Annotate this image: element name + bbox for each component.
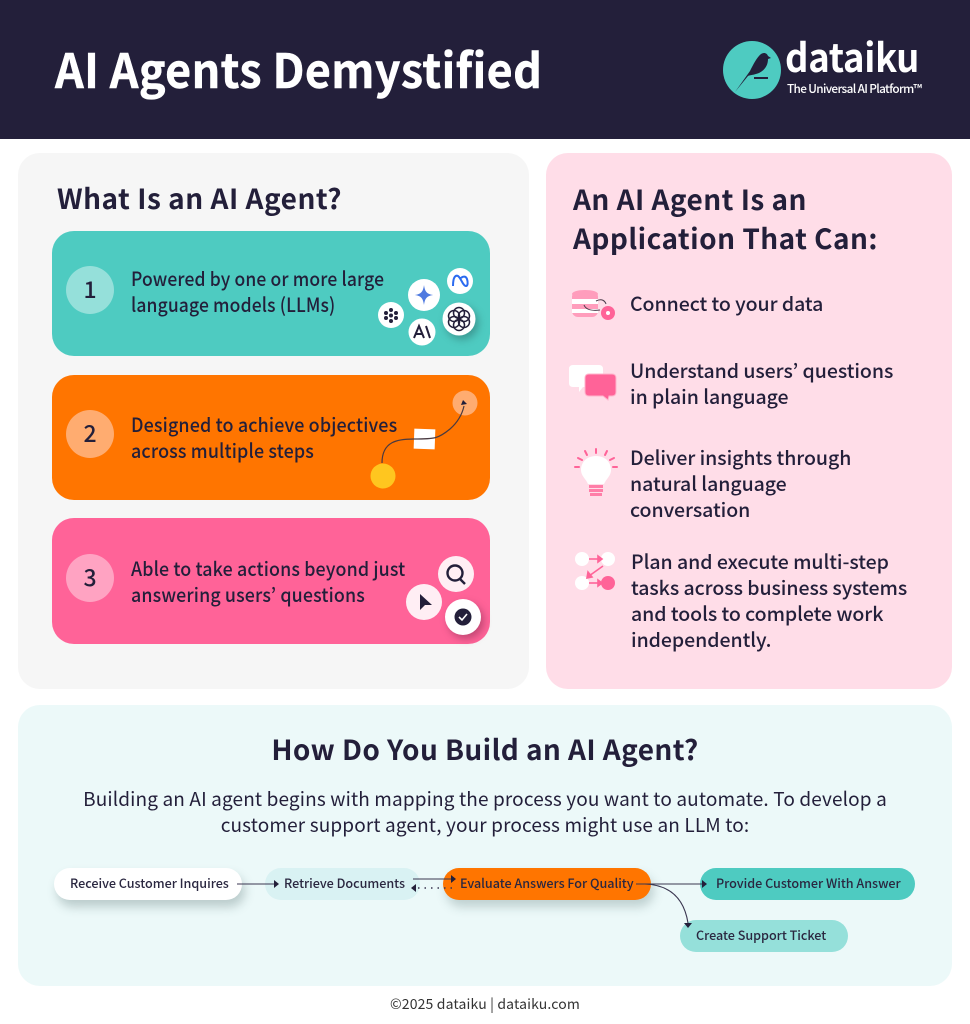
text: deliver insights: natural language — [630, 468, 787, 497]
card 2 text — [131, 409, 397, 464]
card 1: LLMs — [52, 231, 490, 356]
icon: speech bubbles — [569, 365, 616, 401]
flow arrows — [237, 875, 707, 928]
intro paragraph: Building an AI agent begins with mapping the process you want to automate. To develop a — [83, 785, 887, 812]
number 1: 1 — [83, 271, 97, 305]
number 3: 3 — [83, 559, 97, 593]
text: deliver insights: Deliver insights through — [630, 442, 851, 471]
card 3 text: answering users’ questions — [131, 579, 365, 608]
text: understand questions: in plain language — [630, 381, 789, 410]
card 1 text: Powered by one or more large — [131, 263, 384, 292]
panel: what is an AI agent — [18, 153, 529, 689]
text: plan and execute: independently. — [631, 624, 771, 653]
icon: data connection — [572, 290, 615, 320]
number 2 — [66, 410, 114, 458]
flow node: evaluate — [443, 868, 651, 900]
text: understand questions — [630, 355, 893, 410]
panel: how to build — [18, 705, 952, 986]
footer: ©2025 dataiku | dataiku.com — [390, 994, 580, 1014]
icons: LLM logos — [378, 268, 482, 346]
logo wordmark: dataiku — [785, 28, 919, 84]
heading: application that can: Application That Can: — [573, 218, 878, 258]
logo: dataiku — [723, 28, 922, 99]
icon: workflow — [575, 552, 615, 590]
card 2: objectives — [52, 375, 490, 500]
panel: an AI agent can — [546, 153, 952, 689]
header band — [0, 0, 970, 139]
card 3 text: Able to take actions beyond just — [131, 553, 405, 582]
intro paragraph — [83, 785, 887, 838]
card 3: actions — [52, 518, 490, 644]
heading: application that can: An AI Agent Is an — [573, 179, 807, 219]
card 1 text: language models (LLMs) — [131, 289, 335, 318]
card 1 text — [131, 263, 384, 318]
intro paragraph: customer support agent, your process might use an LLM to: — [221, 811, 749, 838]
flow node: retrieve: Retrieve Documents — [284, 873, 405, 892]
icon: bird logo — [723, 41, 781, 99]
icons: actions — [406, 556, 488, 642]
text: plan and execute: and tools to complete work — [631, 598, 883, 627]
card 2 text: Designed to achieve objectives — [131, 409, 397, 438]
card 2 text: across multiple steps — [131, 435, 314, 464]
flow node: receive: Receive Customer Inquires — [70, 873, 229, 892]
flow node: retrieve — [265, 868, 420, 900]
number 2: 2 — [83, 415, 97, 449]
title: AI Agents Demystified — [55, 33, 542, 102]
logo tagline: The Universal AI Platform™ — [787, 80, 921, 97]
flow node: provide — [700, 868, 915, 900]
number 3 — [66, 554, 114, 602]
text: understand questions: Understand users’ questions — [630, 355, 893, 384]
flow node: receive — [54, 868, 242, 900]
icon: step path — [370, 390, 478, 488]
text: deliver insights: conversation — [630, 494, 750, 523]
flow node: provide: Provide Customer With Answer — [716, 873, 901, 892]
flow node: ticket — [680, 920, 848, 952]
heading: what is an AI agent: What Is an AI Agent? — [57, 178, 342, 218]
text: connect data: Connect to your data — [630, 288, 823, 317]
flow node: evaluate: Evaluate Answers For Quality — [460, 873, 634, 892]
text: deliver insights — [630, 442, 851, 523]
card 3 text — [131, 553, 405, 608]
heading: how do you build: How Do You Build an AI Agent? — [271, 729, 699, 769]
heading: application that can — [572, 179, 878, 258]
icon: light bulb — [574, 448, 618, 496]
number 1 — [66, 266, 114, 314]
text: plan and execute: Plan and execute multi-step — [631, 546, 889, 575]
flow node: ticket: Create Support Ticket — [696, 925, 826, 944]
text: plan and execute: tasks across business systems — [631, 572, 907, 601]
text: plan and execute — [631, 546, 907, 653]
